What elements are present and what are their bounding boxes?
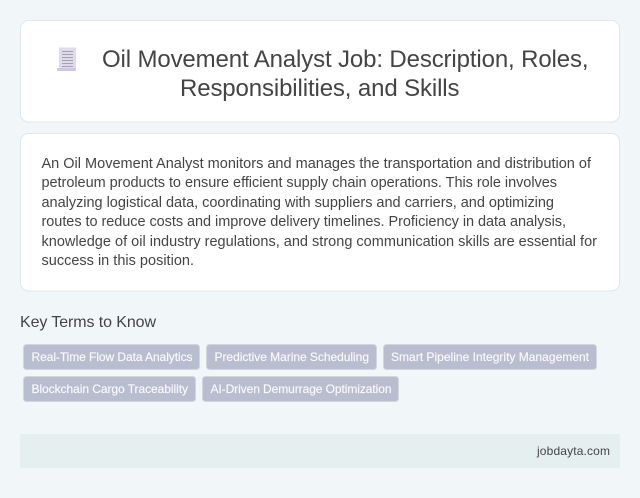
- tag: smart pipeline: Smart Pipeline Integrity Management: [391, 350, 590, 364]
- tag: ai-driven demurrage: [202, 376, 398, 402]
- tag: smart pipeline: [384, 344, 596, 370]
- panel: description card: [20, 134, 620, 291]
- footer: [20, 434, 620, 468]
- footer source: jobdayta.com: [536, 444, 610, 458]
- tags: key terms: [24, 344, 596, 402]
- tag: blockchain cargo: [24, 376, 196, 402]
- description text: An Oil Movement Analyst monitors and manages the transportation and distribution of: [42, 156, 592, 172]
- tag: ai-driven demurrage: AI-Driven Demurrage Optimization: [210, 382, 392, 396]
- tag: blockchain cargo: Blockchain Cargo Traceability: [32, 382, 188, 396]
- description text: success in this position.: [42, 253, 194, 269]
- tag: predictive marine: Predictive Marine Scheduling: [214, 350, 369, 364]
- description text: [42, 156, 597, 269]
- description text: analyzing logistical data, coordinating with suppliers and carriers, and optimizing: [42, 195, 554, 211]
- description text: petroleum products to ensure efficient supply chain operations. This role involves: [42, 175, 557, 191]
- title: Oil Movement Analyst Job: Description, Roles,: [102, 46, 588, 73]
- title: [102, 46, 588, 102]
- tag: predictive marine: [206, 344, 376, 370]
- panel: title card: [20, 20, 620, 122]
- tag: real-time flow: Real-Time Flow Data Analytics: [32, 350, 192, 364]
- heading: key terms: Key Terms to Know: [20, 314, 156, 331]
- icon: document scroll: [57, 48, 76, 71]
- description text: routes to reduce costs and improve delivery timelines. Proficiency in data analysis,: [42, 214, 566, 230]
- tag: real-time flow: [24, 344, 200, 370]
- title: Responsibilities, and Skills: [180, 75, 460, 102]
- description text: knowledge of oil industry regulations, and strong communication skills are essential for: [42, 234, 597, 250]
